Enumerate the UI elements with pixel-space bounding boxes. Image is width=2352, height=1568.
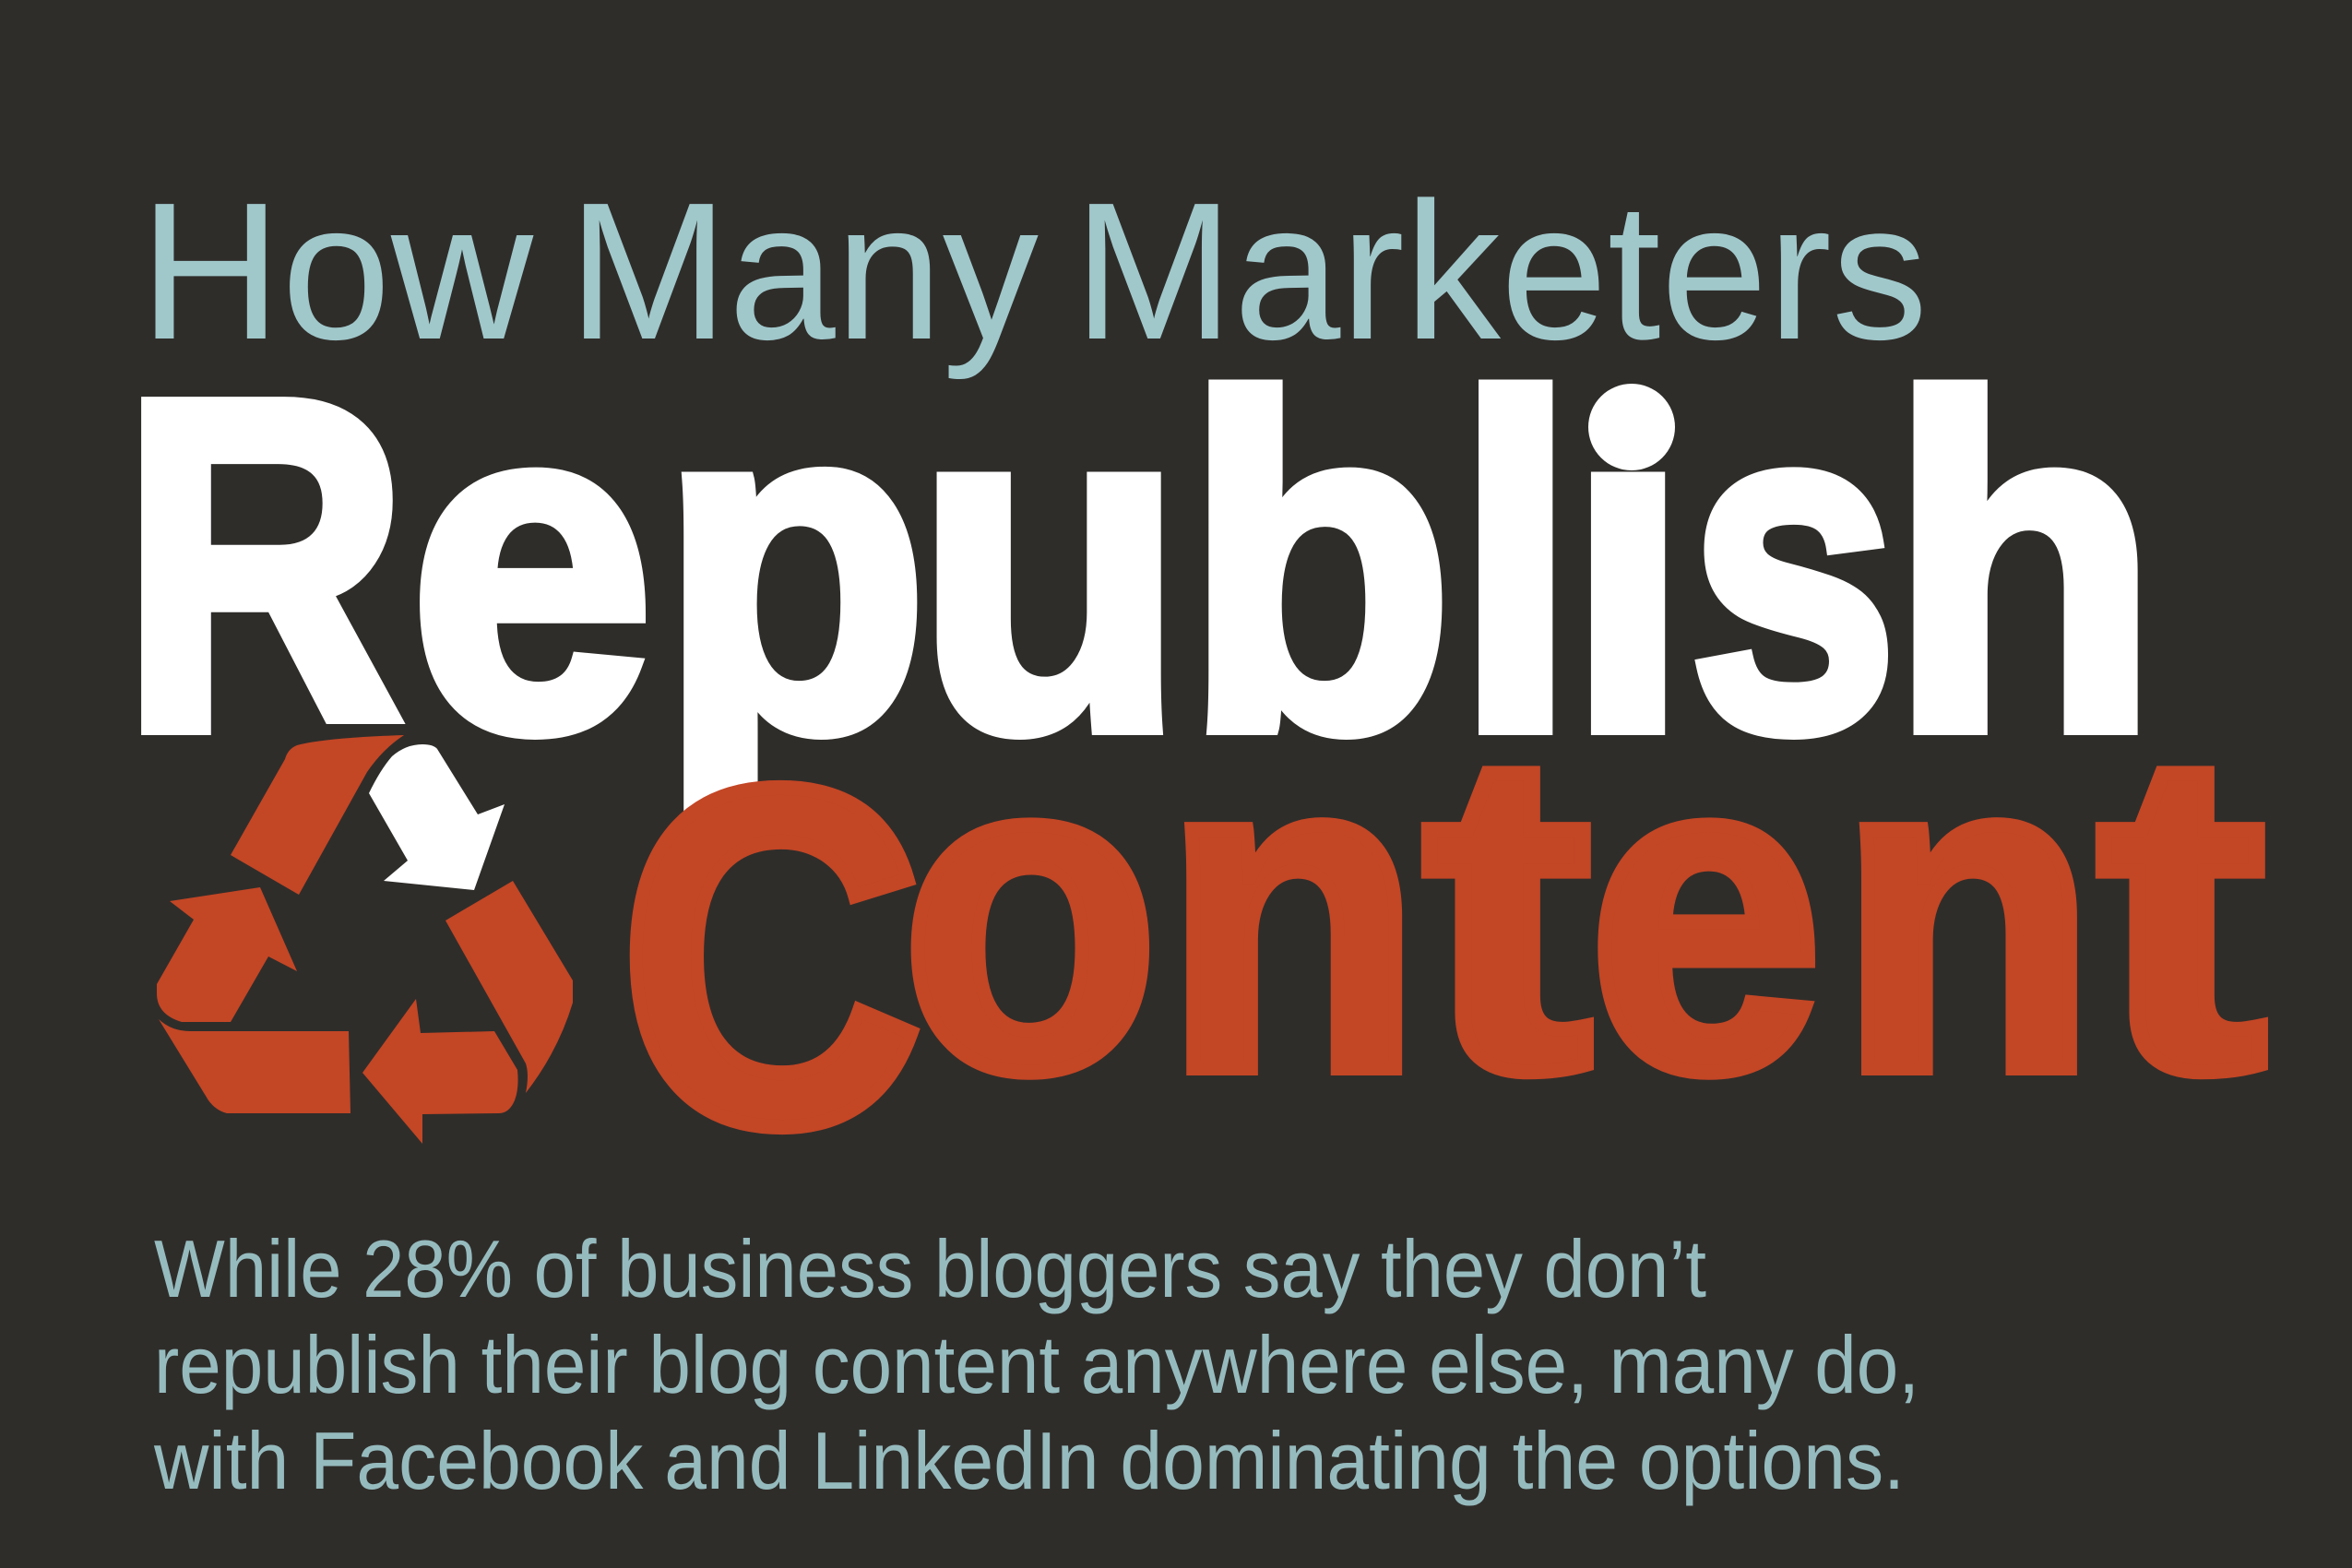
word: marketers: Marketers — [1074, 161, 1928, 380]
title: content — [619, 659, 2266, 1225]
title: content: on — [901, 659, 1421, 1164]
title: republish: epubli — [410, 302, 1689, 831]
icon: recycle arrows — [157, 735, 573, 1144]
i dot — [1588, 384, 1675, 470]
intro paragraph — [153, 1223, 1919, 1506]
paragraph line 1: While 28% of business bloggers say they don’t — [154, 1223, 1706, 1314]
paragraph line 2: republish their blog content anywhere else, many do, — [154, 1319, 1919, 1410]
word: how: How — [139, 161, 534, 380]
title: content: t — [1423, 659, 1592, 1165]
title: content: C — [619, 689, 923, 1225]
title: republish: s — [1689, 302, 1897, 827]
title: republish: R — [121, 303, 409, 828]
title: content: en — [1588, 659, 2097, 1164]
title: content: t — [2097, 659, 2266, 1165]
title: how many marketers — [139, 161, 1928, 380]
paragraph line 3: with Facebook and LinkedIn dominating the options. — [153, 1415, 1905, 1506]
title: republish — [121, 302, 2158, 831]
title: republish: h — [1890, 302, 2158, 828]
word: many: Many — [568, 161, 1039, 380]
